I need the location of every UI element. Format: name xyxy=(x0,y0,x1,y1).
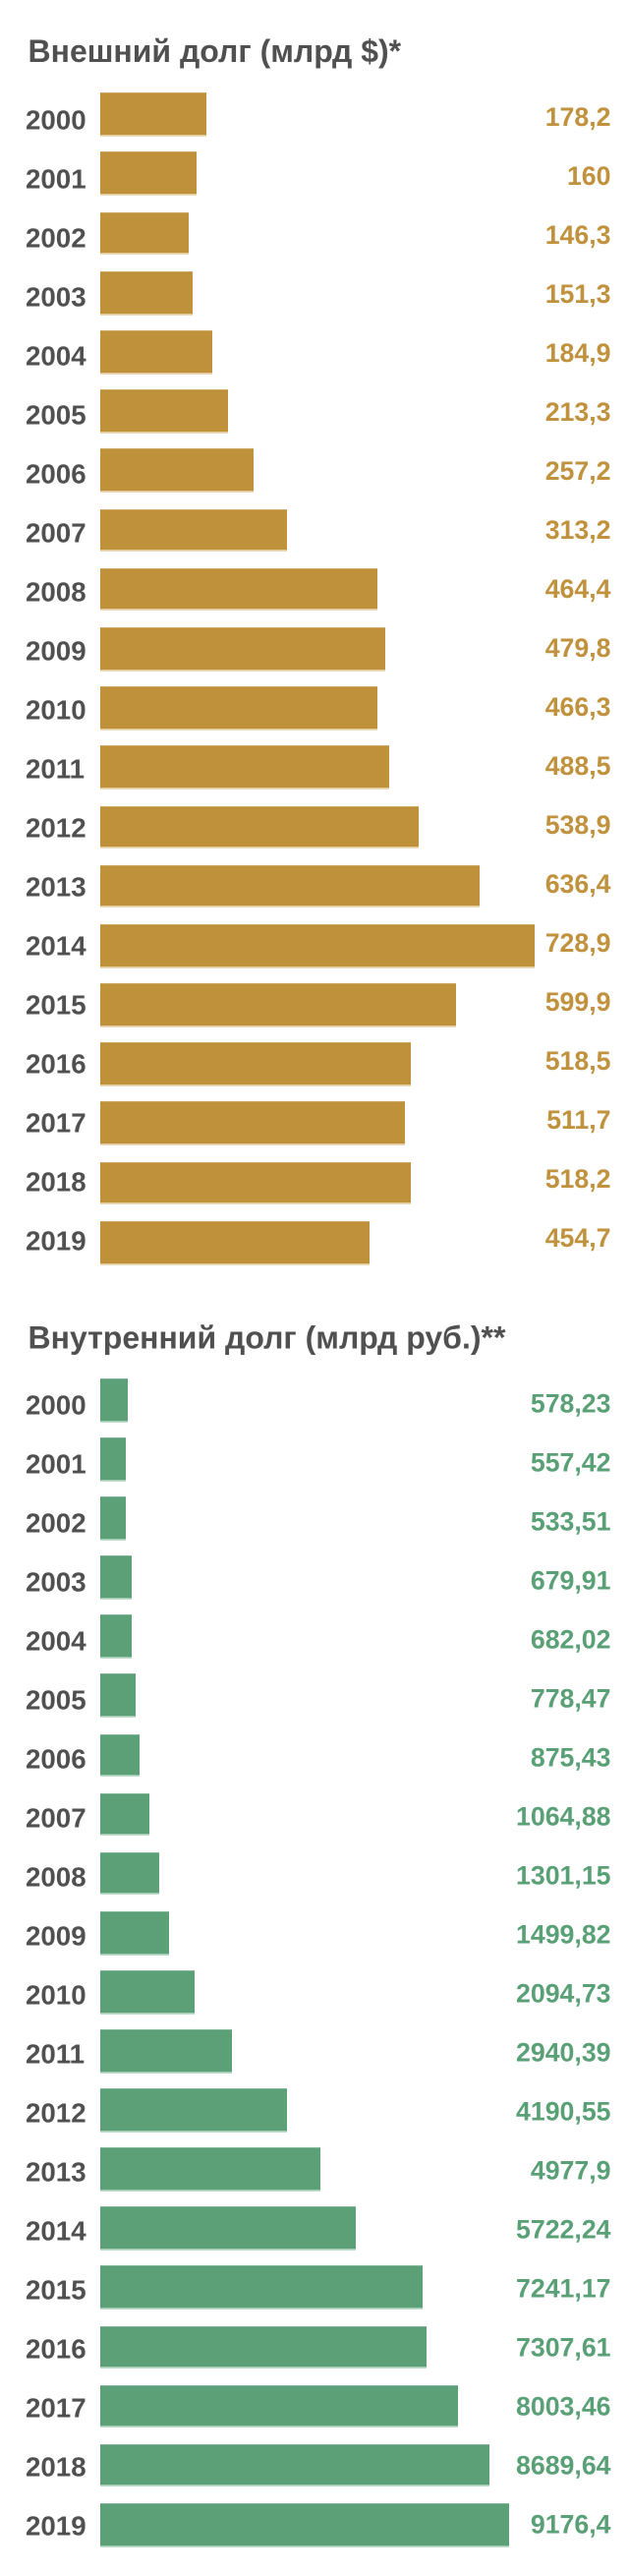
row 2013: 2013 xyxy=(26,2157,86,2187)
row 2006: 2006 xyxy=(26,458,86,490)
row 2000: 2000 xyxy=(26,104,86,136)
row 2001: 557,42 xyxy=(531,1447,611,1477)
row 2002 xyxy=(26,212,611,255)
row 2013 xyxy=(26,865,611,907)
row 2010: 2010 xyxy=(26,694,86,726)
row 2011: 488,5 xyxy=(545,751,611,781)
row 2003: 679,91 xyxy=(531,1565,611,1595)
row 2017 xyxy=(26,2385,611,2428)
row 2009 xyxy=(26,1911,611,1956)
heading: external debt: Внешний долг (млрд $)* xyxy=(28,33,402,69)
row 2004 xyxy=(26,1614,611,1659)
row 2005: 213,3 xyxy=(545,397,611,427)
row 2001: 2001 xyxy=(26,1449,86,1479)
row 2012: 2012 xyxy=(26,2098,86,2128)
row 2014: 5722,24 xyxy=(516,2214,611,2244)
row 2011: 2011 xyxy=(26,2039,85,2069)
row 2007: 1064,88 xyxy=(516,1801,611,1831)
row 2001: 160 xyxy=(567,161,611,191)
row 2007: 313,2 xyxy=(545,515,611,545)
row 2004: 2004 xyxy=(26,1626,86,1656)
row 2008: 2008 xyxy=(26,576,86,608)
row 2012: 4190,55 xyxy=(516,2096,611,2126)
row 2019 xyxy=(26,1221,611,1265)
row 2018: 8689,64 xyxy=(516,2450,611,2480)
row 2010 xyxy=(26,686,611,731)
row 2016: 2016 xyxy=(26,1048,86,1080)
row 2019: 9176,4 xyxy=(531,2509,611,2539)
row 2009: 2009 xyxy=(26,635,86,667)
row 2004: 2004 xyxy=(26,340,86,372)
row 2002: 2002 xyxy=(26,222,86,254)
row 2014: 2014 xyxy=(26,930,86,962)
row 2008: 464,4 xyxy=(545,574,611,604)
row 2002: 533,51 xyxy=(531,1506,611,1536)
row 2018: 2018 xyxy=(26,1166,86,1198)
row 2006 xyxy=(26,448,611,493)
row 2006 xyxy=(26,1734,611,1777)
row 2017: 511,7 xyxy=(546,1105,611,1135)
row 2005: 778,47 xyxy=(531,1683,611,1713)
row 2013: 2013 xyxy=(26,871,86,903)
row 2013: 636,4 xyxy=(545,869,611,899)
row 2011 xyxy=(26,745,611,790)
row 2004 xyxy=(26,330,611,375)
row 2013 xyxy=(26,2147,611,2192)
row 2015: 599,9 xyxy=(545,987,611,1017)
row 2007 xyxy=(26,1793,611,1836)
row 2007: 2007 xyxy=(26,517,86,549)
row 2010 xyxy=(26,1970,611,2015)
row 2018 xyxy=(26,2444,611,2487)
row 2018: 2018 xyxy=(26,2452,86,2482)
row 2000: 178,2 xyxy=(545,102,611,132)
row 2005 xyxy=(26,1673,611,1718)
row 2013: 4977,9 xyxy=(531,2155,611,2185)
row 2018 xyxy=(26,1162,611,1204)
row 2008 xyxy=(26,568,611,611)
row 2003 xyxy=(26,271,611,316)
row 2009: 1499,82 xyxy=(516,1919,611,1949)
row 2019: 2019 xyxy=(26,1225,86,1257)
row 2015: 2015 xyxy=(26,989,86,1021)
row 2014: 2014 xyxy=(26,2216,86,2246)
row 2014 xyxy=(26,924,611,968)
row 2000 xyxy=(26,1378,611,1423)
row 2001 xyxy=(26,151,611,196)
heading: domestic debt: Внутренний долг (млрд руб.)** xyxy=(28,1320,506,1356)
row 2006: 875,43 xyxy=(531,1742,611,1772)
row 2000 xyxy=(26,92,611,137)
row 2010: 2010 xyxy=(26,1980,86,2010)
row 2016 xyxy=(26,1042,611,1086)
row 2008 xyxy=(26,1852,611,1895)
row 2005: 2005 xyxy=(26,399,86,431)
row 2006: 257,2 xyxy=(545,456,611,486)
row 2004: 184,9 xyxy=(545,338,611,368)
row 2012 xyxy=(26,806,611,849)
row 2019 xyxy=(26,2503,611,2547)
row 2017: 2017 xyxy=(26,2393,86,2423)
row 2004: 682,02 xyxy=(531,1624,611,1654)
row 2018: 518,2 xyxy=(545,1164,611,1194)
row 2016 xyxy=(26,2326,611,2369)
row 2016: 518,5 xyxy=(545,1046,611,1076)
row 2016: 2016 xyxy=(26,2334,86,2364)
row 2010: 2094,73 xyxy=(516,1978,611,2008)
row 2014 xyxy=(26,2206,611,2251)
row 2008: 1301,15 xyxy=(516,1860,611,1890)
row 2003: 151,3 xyxy=(545,279,611,309)
row 2012 xyxy=(26,2088,611,2133)
row 2016: 7307,61 xyxy=(516,2332,611,2362)
row 2007 xyxy=(26,509,611,552)
row 2003: 2003 xyxy=(26,1567,86,1597)
row 2011 xyxy=(26,2029,611,2074)
row 2007: 2007 xyxy=(26,1803,86,1833)
row 2001 xyxy=(26,1437,611,1482)
row 2014: 728,9 xyxy=(545,928,611,958)
panel: external debt chart xyxy=(26,33,611,1265)
row 2000: 2000 xyxy=(26,1390,86,1420)
row 2019: 2019 xyxy=(26,2511,86,2541)
row 2009: 2009 xyxy=(26,1921,86,1951)
row 2012: 538,9 xyxy=(545,810,611,840)
row 2002: 2002 xyxy=(26,1508,86,1538)
row 2003 xyxy=(26,1555,611,1600)
row 2015: 7241,17 xyxy=(516,2273,611,2303)
row 2015: 2015 xyxy=(26,2275,86,2305)
row 2003: 2003 xyxy=(26,281,86,313)
row 2005: 2005 xyxy=(26,1685,86,1715)
row 2010: 466,3 xyxy=(545,692,611,722)
row 2006: 2006 xyxy=(26,1744,86,1774)
row 2011: 2011 xyxy=(26,753,85,785)
row 2011: 2940,39 xyxy=(516,2037,611,2067)
panel: domestic debt chart xyxy=(26,1320,611,2547)
row 2015 xyxy=(26,983,611,1027)
row 2001: 2001 xyxy=(26,163,86,195)
row 2005 xyxy=(26,389,611,434)
row 2015 xyxy=(26,2265,611,2310)
row 2000: 578,23 xyxy=(531,1388,611,1418)
row 2002: 146,3 xyxy=(545,220,611,250)
row 2017: 8003,46 xyxy=(516,2391,611,2421)
row 2017 xyxy=(26,1101,611,1145)
row 2008: 2008 xyxy=(26,1862,86,1892)
row 2009 xyxy=(26,627,611,672)
row 2017: 2017 xyxy=(26,1107,86,1139)
row 2012: 2012 xyxy=(26,812,86,844)
row 2002 xyxy=(26,1496,611,1541)
row 2009: 479,8 xyxy=(545,633,611,663)
row 2019: 454,7 xyxy=(545,1223,611,1253)
